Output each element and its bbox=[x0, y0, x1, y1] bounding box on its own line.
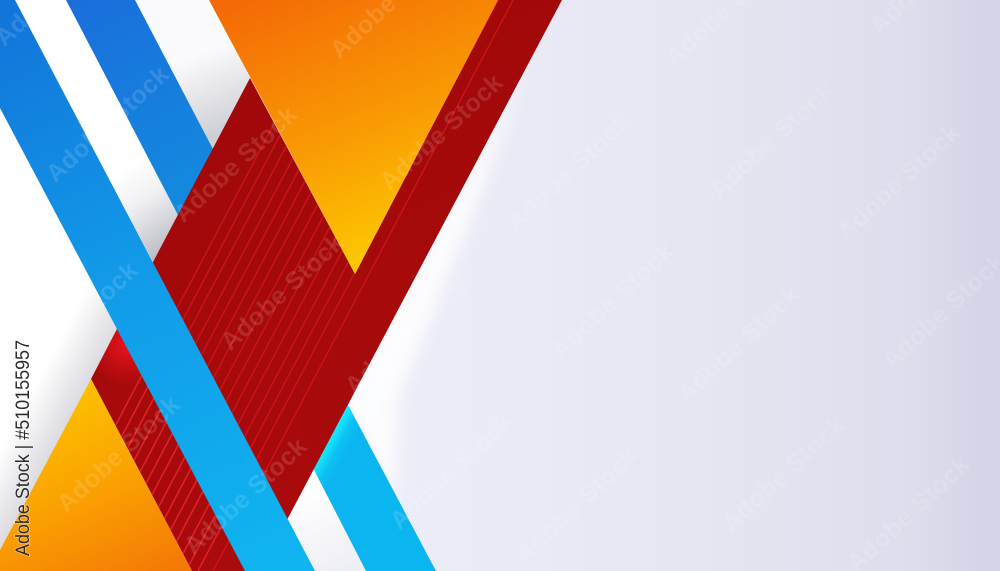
diagonal stripes, upper section bbox=[115, 0, 514, 571]
Adobe Stock watermarks: Adobe Stock bbox=[717, 410, 851, 538]
Adobe Stock watermarks: Adobe Stock bbox=[375, 68, 509, 196]
white strip with shadow between blue bands bbox=[14, 0, 179, 262]
white lower strip bbox=[286, 468, 366, 571]
Adobe Stock watermarks: Adobe Stock bbox=[340, 272, 474, 400]
red chevron band with stripes bbox=[91, 0, 562, 571]
lower left orange triangle bbox=[0, 379, 192, 571]
long diagonal blue band bbox=[0, 0, 315, 571]
Adobe Stock watermarks: Adobe Stock bbox=[10, 256, 144, 384]
lower cyan band bbox=[313, 403, 436, 571]
Adobe Stock watermarks: Adobe Stock bbox=[705, 76, 839, 204]
Adobe Stock watermarks: Adobe Stock bbox=[52, 390, 186, 518]
Adobe Stock watermarks: Adobe Stock bbox=[169, 100, 303, 228]
vertical stock id label: Adobe Stock | #510155957 bbox=[12, 340, 34, 556]
white glow beside red band bbox=[350, 126, 500, 479]
Adobe Stock watermarks: Adobe Stock bbox=[672, 280, 806, 408]
Adobe Stock watermarks: Adobe Stock bbox=[510, 441, 644, 569]
Adobe Stock watermarks: Adobe Stock bbox=[832, 118, 966, 246]
upper blue band bbox=[66, 0, 214, 217]
panel: lilac right background bbox=[340, 0, 1000, 571]
Adobe Stock watermarks: Adobe Stock bbox=[41, 60, 175, 188]
red corner glow bbox=[98, 329, 142, 381]
brighter stripes lower left bbox=[115, 375, 222, 571]
Adobe Stock watermarks: Adobe Stock bbox=[179, 432, 313, 560]
white left area with shadow bbox=[0, 108, 119, 550]
Adobe Stock watermarks: Adobe Stock bbox=[385, 407, 519, 535]
white strip with shadow at top bbox=[135, 0, 252, 151]
top orange triangle bbox=[209, 0, 498, 274]
Adobe Stock watermarks: Adobe Stock bbox=[216, 228, 350, 356]
Adobe Stock watermarks: Adobe Stock bbox=[546, 237, 680, 365]
Adobe Stock watermarks: Adobe Stock bbox=[502, 108, 636, 236]
